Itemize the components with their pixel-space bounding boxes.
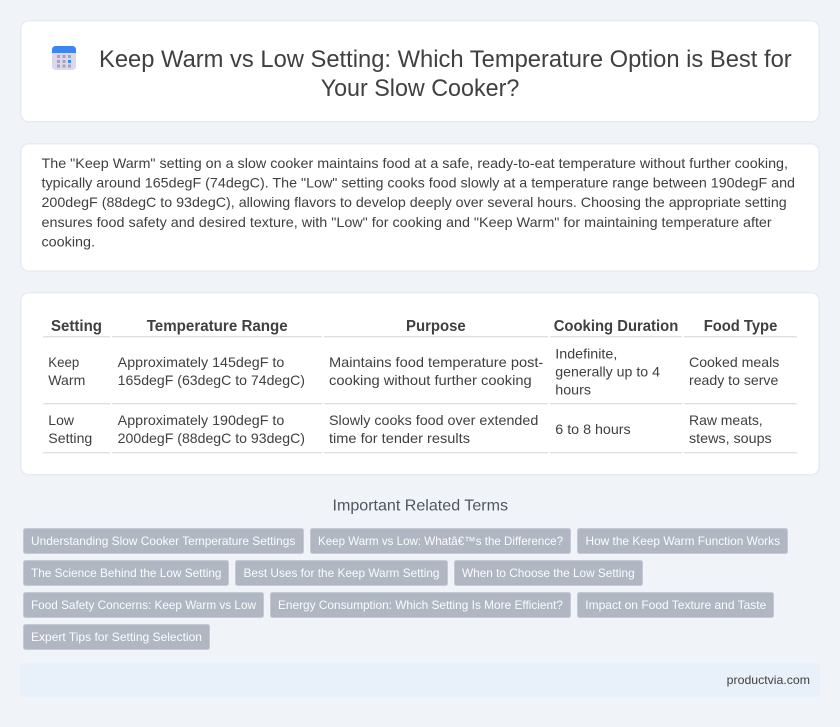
table row: Keep Warm: Approximately 145degF to (118, 354, 285, 370)
text block: description paragraph (42, 155, 795, 249)
tag: how keep warm works: How the Keep Warm Function Works (586, 534, 780, 548)
tag: best uses for keep warm: Best Uses for the Keep Warm Setting (244, 566, 440, 580)
table row: Low Setting: 6 to 8 hours (555, 421, 631, 437)
tag: keep warm vs low difference (310, 528, 570, 554)
title (99, 46, 792, 102)
table row: Low Setting: Setting (48, 430, 92, 446)
heading: important related terms: Important Related Terms (332, 498, 508, 514)
table header row: Purpose (406, 318, 466, 335)
table row: Low Setting: Low (48, 412, 75, 428)
related term tags (24, 528, 788, 650)
text block: description paragraph: typically around 165degF (74degC). The "Low" setting cooks food slowly at a temperature range between 190degF and (42, 175, 795, 191)
table row: Keep Warm (48, 346, 779, 398)
table row: Low Setting: Raw meats, (689, 412, 763, 428)
table row: Keep Warm: generally up to 4 (555, 364, 660, 380)
tag: understanding temperature settings: Understanding Slow Cooker Temperature Settings (31, 534, 295, 548)
tag: energy consumption: Energy Consumption: Which Setting Is More Efficient? (278, 598, 563, 612)
tag: science behind low (24, 560, 228, 586)
tag: when to choose low (454, 560, 642, 586)
tag: best uses for keep warm (236, 560, 448, 586)
footer (20, 663, 820, 697)
table header row: Temperature Range (147, 318, 288, 335)
table row: Low Setting: stews, soups (689, 430, 772, 446)
table row: Low Setting: Approximately 190degF to (118, 412, 285, 428)
table row: Keep Warm: Maintains food temperature post- (329, 354, 544, 370)
panel: description (21, 144, 819, 271)
table row: Keep Warm: Warm (48, 372, 85, 388)
text block: description paragraph: cooking. (42, 233, 95, 249)
table row: Low Setting: Slowly cooks food over extended (329, 412, 538, 428)
text block: description paragraph: 200degF (88degC to 93degC), allowing flavors to develop deeply over several hours. Choosing the appropriate setting (42, 194, 787, 210)
table row: Low Setting: time for tender results (329, 430, 470, 446)
text block: description paragraph: ensures food safety and desired texture, with "Low" for cooking and "Keep Warm" for maintaining temperature after (42, 214, 772, 230)
table row: Keep Warm: 165degF (63degC to 74degC) (118, 372, 305, 388)
table row: Keep Warm: Cooked meals (689, 354, 779, 370)
tag: science behind low: The Science Behind the Low Setting (31, 566, 222, 580)
panel: title header (21, 21, 819, 122)
table header row: Cooking Duration (554, 318, 678, 335)
text block: description paragraph: The "Keep Warm" setting on a slow cooker maintains food at a safe, ready-to-eat temperature without further cooking, (42, 155, 788, 171)
tag: expert tips: Expert Tips for Setting Selection (31, 630, 202, 644)
icon: calendar grid (52, 46, 76, 70)
table header row: Food Type (704, 318, 777, 335)
table row: Keep Warm: Indefinite, (555, 346, 617, 362)
panel: comparison table (21, 293, 819, 475)
tag: expert tips (24, 624, 210, 650)
table row: Keep Warm: cooking without further cooking (329, 372, 532, 388)
tag: texture and taste: Impact on Food Texture and Taste (585, 598, 767, 612)
tag: texture and taste (578, 592, 774, 618)
table row: Low Setting: 200degF (88degC to 93degC) (118, 430, 305, 446)
tag: food safety: Food Safety Concerns: Keep Warm vs Low (31, 598, 256, 612)
tag: food safety (24, 592, 264, 618)
table row: Keep Warm: ready to serve (689, 372, 779, 388)
tag: keep warm vs low difference: Keep Warm vs Low: Whatâ€™s the Difference? (318, 534, 563, 548)
table row: Keep Warm: Keep (48, 354, 79, 370)
title: Your Slow Cooker? (321, 75, 519, 102)
tag: energy consumption (270, 592, 570, 618)
tag: how keep warm works (578, 528, 788, 554)
table row: Low Setting (48, 412, 772, 446)
tag: understanding temperature settings (24, 528, 304, 554)
footer source text: productvia.com (727, 673, 810, 687)
title: Keep Warm vs Low Setting: Which Temperature Option is Best for (99, 46, 792, 73)
tag: when to choose low: When to Choose the Low Setting (462, 566, 635, 580)
table header row: Setting (51, 318, 102, 335)
table row: Keep Warm: hours (555, 382, 591, 398)
table header row (51, 318, 777, 335)
